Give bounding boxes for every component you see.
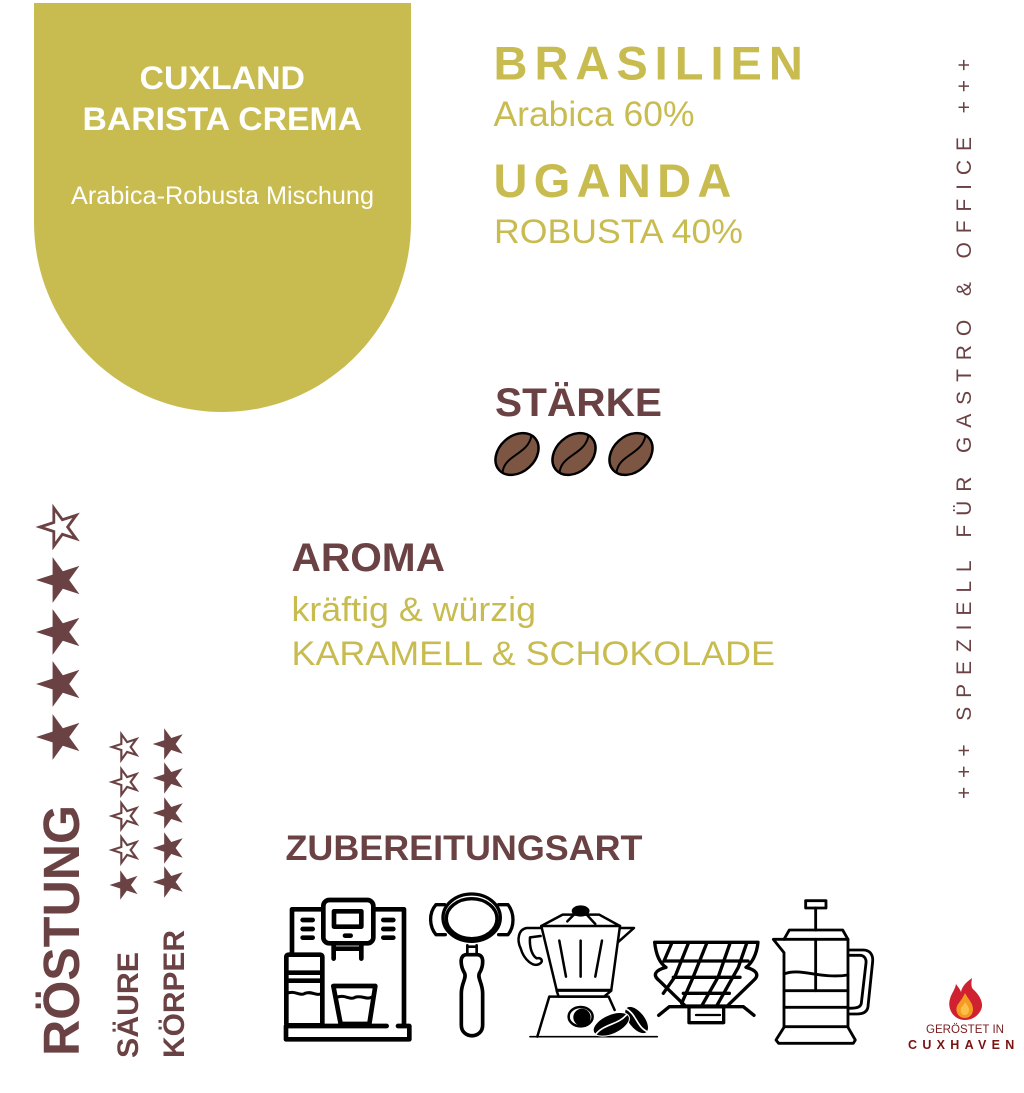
label: Säure: SÄURE bbox=[112, 952, 145, 1058]
aroma description: KARAMELL & SCHOKOLADE bbox=[292, 635, 775, 673]
icon: portafilter bbox=[431, 894, 513, 1036]
rating: Körper stars bbox=[153, 728, 183, 898]
origin: Uganda: UGANDA bbox=[494, 154, 738, 207]
vertical slogan: +++ SPEZIELL FÜR GASTRO & OFFICE +++ bbox=[953, 50, 976, 799]
icon: coffee machine bbox=[286, 900, 409, 1039]
heading: Aroma: AROMA bbox=[292, 536, 445, 580]
icon: french press bbox=[773, 901, 873, 1043]
icon: moka pot with beans bbox=[519, 907, 657, 1041]
icon: three coffee beans bbox=[487, 425, 661, 483]
product name: BARISTA CREMA bbox=[82, 101, 362, 137]
origin: Brasilien bbox=[494, 36, 810, 134]
heading: Stärke: STÄRKE bbox=[495, 381, 662, 425]
origin: Uganda: ROBUSTA 40% bbox=[494, 213, 743, 251]
rating: Röstung stars bbox=[36, 508, 79, 760]
rating: Säure stars bbox=[110, 734, 138, 900]
label: Körper: KÖRPER bbox=[158, 930, 191, 1058]
icon: flame bbox=[949, 978, 982, 1020]
product name bbox=[82, 60, 362, 137]
icon: pour-over dripper bbox=[655, 942, 758, 1023]
aroma description: kräftig & würzig bbox=[292, 591, 536, 629]
product name: CUXLAND bbox=[140, 60, 305, 96]
logo: roasted in Cuxhaven bbox=[908, 978, 1020, 1052]
origin: Uganda bbox=[494, 154, 743, 251]
product subtitle: Arabica-Robusta Mischung bbox=[71, 182, 374, 210]
roasted in text: GERÖSTET IN bbox=[926, 1024, 1004, 1036]
origin: Brasilien: BRASILIEN bbox=[494, 36, 810, 90]
heading: Zubereitungsart: ZUBEREITUNGSART bbox=[286, 829, 642, 868]
panel: product label bbox=[34, 3, 411, 412]
aroma description bbox=[292, 591, 775, 673]
label: Röstung: RÖSTUNG bbox=[33, 805, 90, 1056]
origin: Brasilien: Arabica 60% bbox=[494, 95, 694, 134]
Cuxhaven text: CUXHAVEN bbox=[908, 1038, 1020, 1052]
